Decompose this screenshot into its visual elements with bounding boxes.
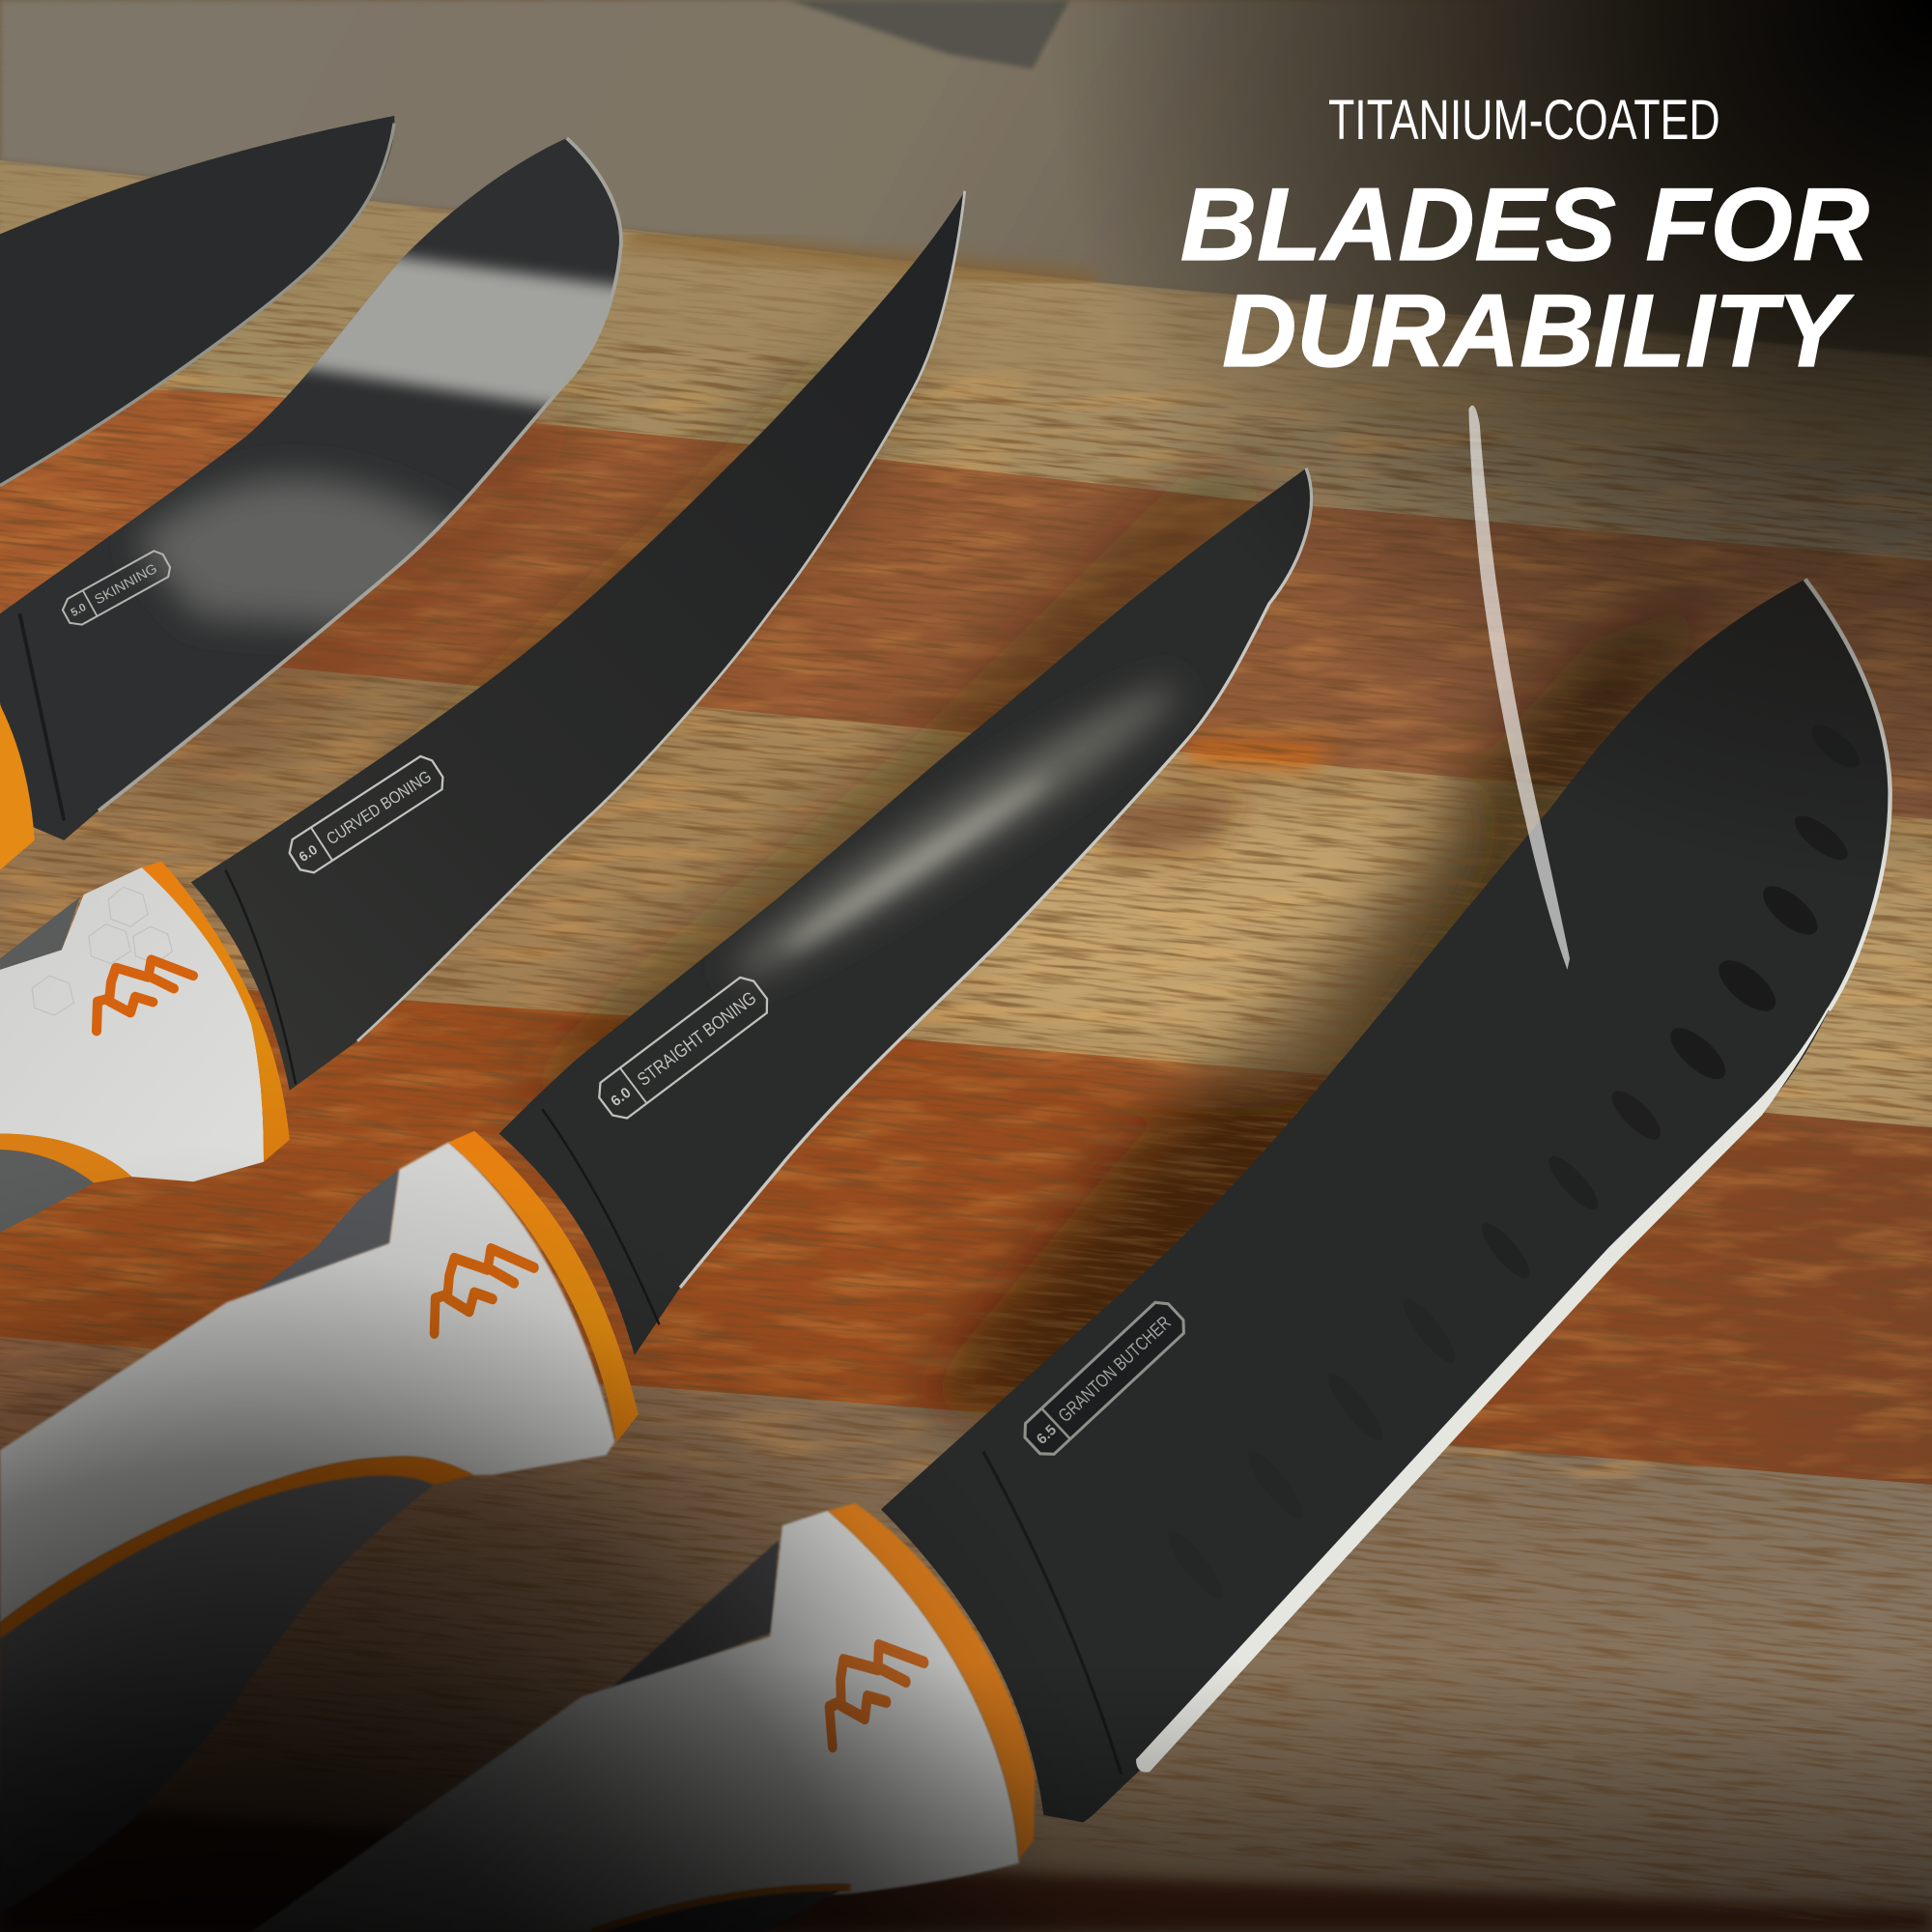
bottom orange band xyxy=(0,1457,473,1638)
orange collar xyxy=(142,862,290,1162)
logo xyxy=(435,1249,534,1333)
blade xyxy=(191,191,965,1091)
logo xyxy=(822,1641,932,1747)
arrow: pointer stroke to blade xyxy=(1468,406,1570,970)
badge: straight boning: 6.0 xyxy=(608,1085,635,1110)
subheading: TITANIUM-COATED xyxy=(1328,89,1720,152)
blade xyxy=(881,579,1890,1822)
blurred block at top xyxy=(788,0,1069,69)
knife 2: skinning xyxy=(0,138,653,870)
white handle xyxy=(251,1511,1019,1932)
granton dimples xyxy=(1160,719,1866,1605)
badge: curved boning: CURVED BONING xyxy=(323,766,435,848)
wood stripe 5 xyxy=(0,1337,1932,1932)
badge: granton butcher: GRANTON BUTCHER xyxy=(1055,1313,1176,1427)
heading: DURABILITY xyxy=(1222,272,1854,388)
blade xyxy=(0,138,621,840)
grey grip lower part xyxy=(591,1886,850,1932)
blade shine xyxy=(135,252,653,629)
white handle xyxy=(0,867,264,1181)
wood stripe 2 xyxy=(0,382,1932,819)
cutting edge xyxy=(1805,579,1890,1010)
orange patches xyxy=(0,370,1932,1479)
heading: BLADES FOR xyxy=(1180,166,1869,282)
wood stripe 3 xyxy=(0,640,1932,1127)
badge: straight boning xyxy=(592,972,774,1124)
grey grip lower part xyxy=(0,1150,94,1233)
grey grip top part xyxy=(604,1540,779,1694)
knife 3: curved boning xyxy=(0,191,965,1233)
badge: granton butcher: 6.5 xyxy=(1034,1422,1060,1448)
board lower dark stripe xyxy=(0,1799,1932,1932)
orange collar xyxy=(448,1131,639,1443)
badge: skinning xyxy=(59,548,174,630)
table surface xyxy=(0,0,1932,357)
knife 4: straight boning xyxy=(0,469,1312,1914)
wood stripe 1 xyxy=(0,160,1932,560)
orange handle collar xyxy=(0,705,35,870)
dark grip top part xyxy=(246,1169,399,1297)
grey grip lower part xyxy=(0,1469,434,1914)
badge: skinning: 5.0 xyxy=(70,602,88,619)
orange collar xyxy=(828,1503,1035,1860)
blade xyxy=(499,469,1312,1355)
knife 1: top left blade xyxy=(0,116,394,486)
blade shine xyxy=(718,665,1192,999)
knife 5: granton butcher xyxy=(251,579,1890,1932)
shadows and light on the wood xyxy=(148,234,1932,1441)
logo xyxy=(97,959,193,1031)
badge: skinning: SKINNING xyxy=(92,560,159,608)
badge: curved boning xyxy=(284,753,448,878)
badge: straight boning: STRAIGHT BONING xyxy=(634,988,760,1091)
wood stripe 4 xyxy=(0,974,1932,1485)
badge: granton butcher xyxy=(1018,1296,1190,1461)
dark grip top part xyxy=(0,897,80,970)
heading xyxy=(1180,166,1869,388)
soft focus over top stripe xyxy=(0,160,1932,469)
handle hex texture xyxy=(32,887,173,1015)
white handle xyxy=(0,1142,614,1623)
badge: curved boning: 6.0 xyxy=(296,841,320,865)
sun patches on dark wood xyxy=(1189,739,1337,770)
board rim xyxy=(629,237,1096,281)
bottom orange arc xyxy=(0,1133,131,1182)
